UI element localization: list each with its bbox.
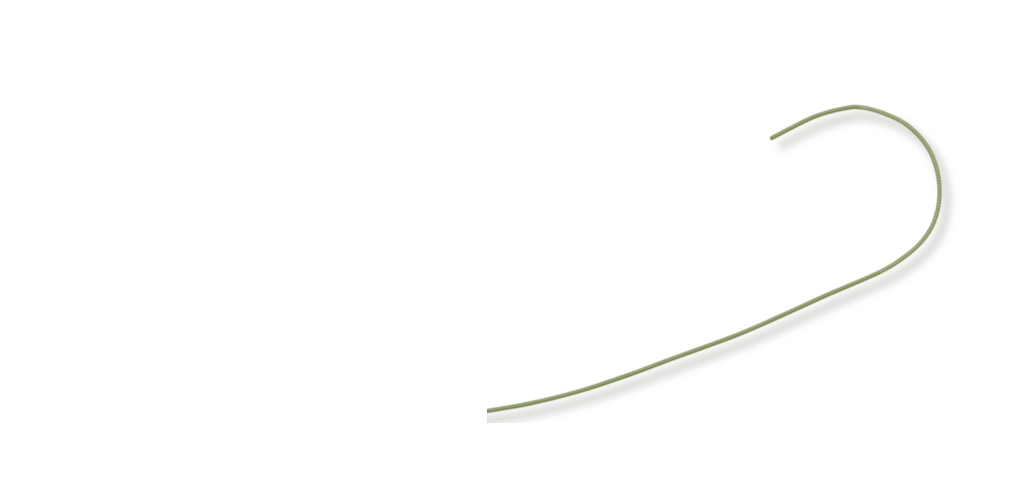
wire drop shadow <box>477 116 947 423</box>
wire highlight <box>487 106 939 410</box>
wire body <box>487 106 940 411</box>
illustration: curved green wire <box>487 104 954 423</box>
wire base stroke <box>487 107 940 411</box>
wire coil texture on upper arc <box>860 107 940 272</box>
